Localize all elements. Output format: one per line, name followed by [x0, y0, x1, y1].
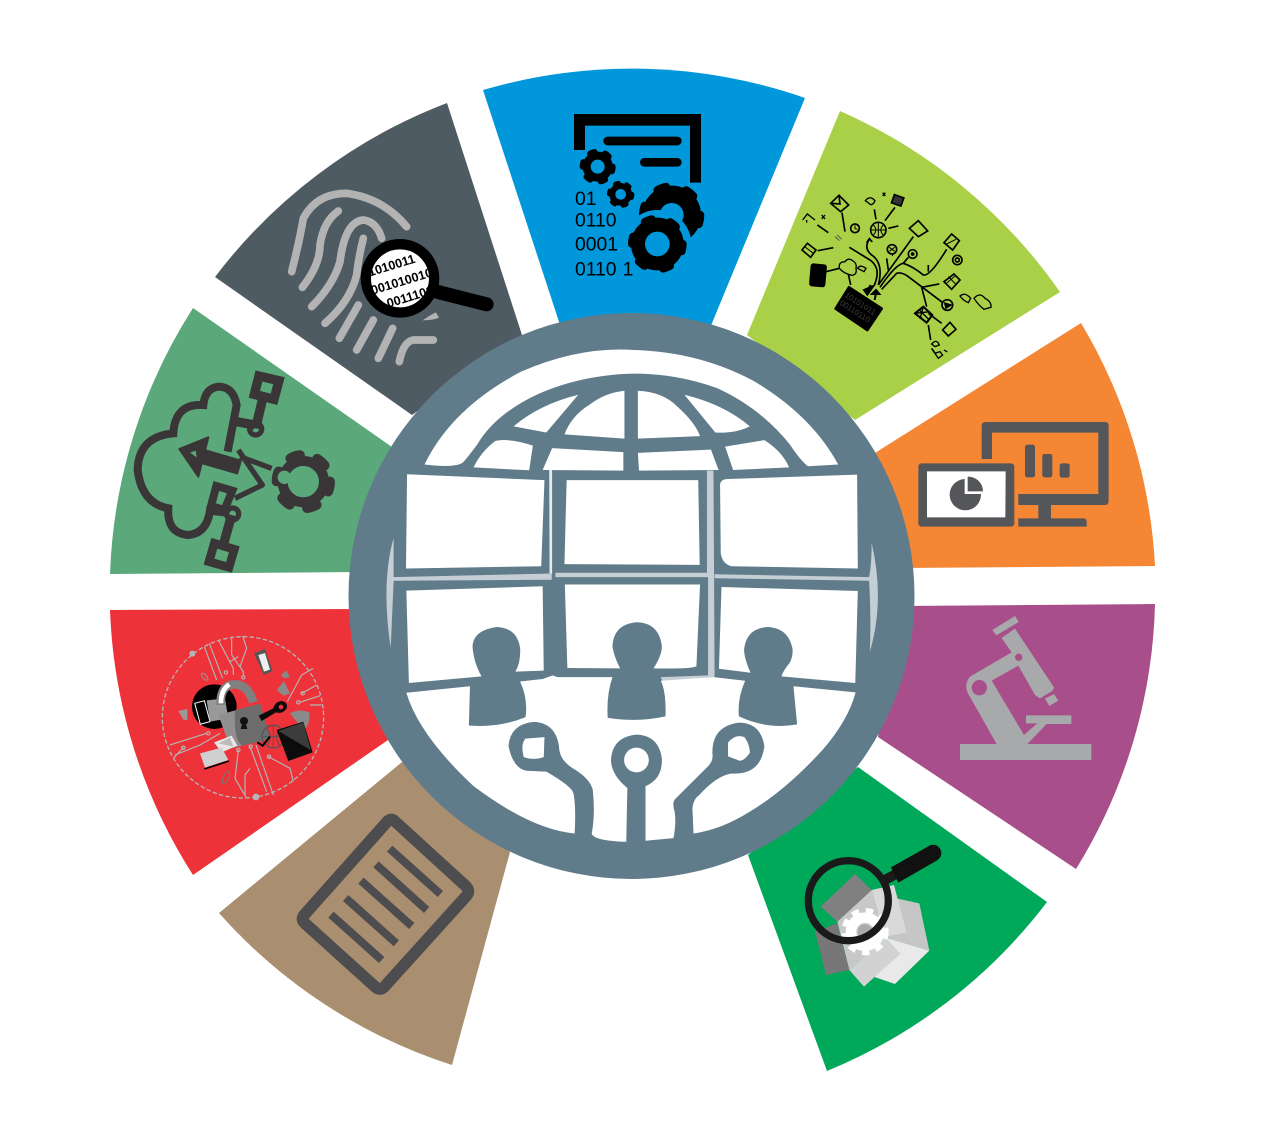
magnifier binary text [366, 252, 435, 311]
globe grid [425, 350, 838, 471]
segment: purple research [878, 604, 1155, 869]
icon: network of connected devices [802, 193, 991, 358]
segment: tan documents [219, 762, 510, 1065]
segment: green inspection [748, 767, 1047, 1071]
central globe emblem [348, 313, 914, 879]
icon: security padlock in circuit circle [162, 636, 324, 800]
people and circuit nodes cut from lower panel [406, 675, 856, 842]
segment: lime internet of things [747, 111, 1060, 420]
segment: sea green cloud [110, 308, 392, 574]
binary digits: 1 [623, 259, 633, 280]
video wall screens [406, 474, 858, 683]
light screen frame highlights [386, 470, 878, 681]
segment: blue data processing [483, 69, 805, 340]
icon: open box under magnifier [808, 845, 941, 987]
binary digits [575, 189, 633, 280]
magnifier binary text: 001010010 [369, 266, 434, 298]
icon: monitors with charts [918, 422, 1109, 527]
magnifier binary text: 1010011 [366, 252, 417, 279]
segment: orange analytics [875, 323, 1155, 568]
data chip: 10101011 [843, 291, 878, 317]
binary digits: 0110 [575, 211, 617, 232]
binary digits: 0110 [575, 259, 617, 280]
icon: document with gears and binary [574, 114, 701, 280]
icon: document [302, 819, 468, 989]
icon: microscope [960, 616, 1091, 760]
icon: fingerprint with magnifier [292, 193, 487, 362]
binary digits: 01 [575, 189, 596, 210]
data chip: 00110110 [838, 298, 872, 325]
magnifier binary text: 0011101 [385, 283, 435, 311]
segment: dark slate forensic fingerprint [215, 103, 522, 415]
icon: cloud with nodes, arrows and gear [138, 376, 330, 567]
data chip [836, 287, 882, 330]
binary digits: 0001 [575, 235, 618, 256]
segment: red cybersecurity [110, 609, 388, 875]
